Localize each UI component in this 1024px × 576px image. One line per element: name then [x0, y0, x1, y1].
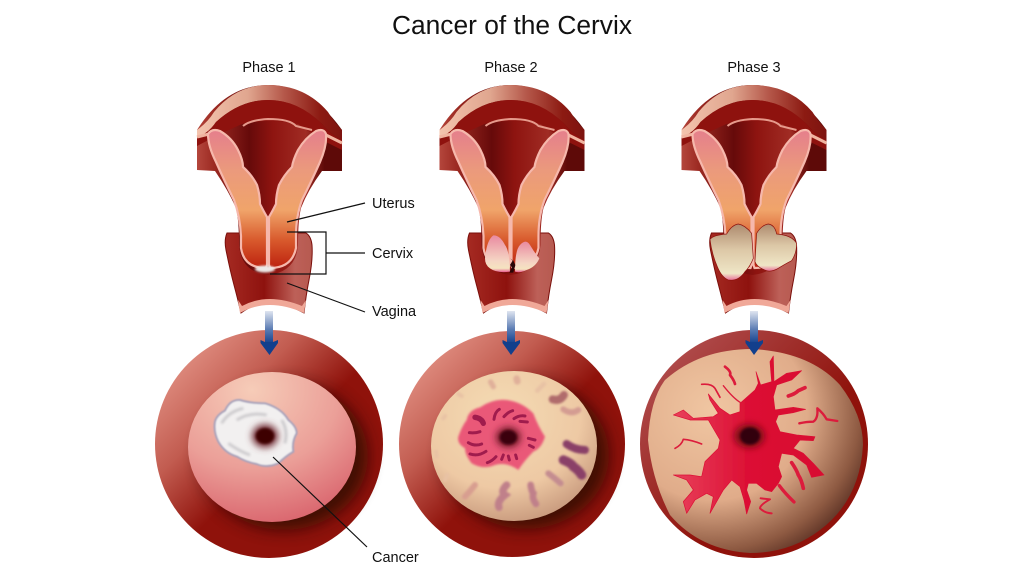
leader: cervix bracket	[270, 232, 365, 274]
diagram: uterus phase 3	[682, 85, 826, 313]
arrow	[260, 311, 278, 355]
central os	[734, 424, 765, 448]
tumours	[485, 235, 539, 273]
circle: cervix view phase 3	[640, 330, 868, 558]
diagram: uterus phase 1	[197, 85, 342, 313]
diagram: uterus phase 2	[440, 85, 584, 313]
circle: cervix view phase 2	[399, 331, 625, 557]
leader: cancer	[273, 457, 367, 547]
label: cancer: Cancer	[372, 550, 419, 566]
phase 3 column	[640, 60, 868, 558]
circle: cervix view phase 1	[155, 330, 383, 558]
phase 1 column	[155, 60, 383, 558]
tumours	[710, 224, 797, 280]
leader: vagina	[287, 283, 365, 312]
leader: uterus	[287, 203, 365, 222]
arrow	[746, 311, 763, 355]
red spreading lesion	[673, 356, 824, 514]
heading: Phase 3: Phase 3	[727, 60, 781, 76]
arrow	[502, 311, 520, 355]
label: cervix: Cervix	[372, 246, 414, 262]
title: Cancer of the Cervix	[392, 12, 632, 40]
heading: Phase 1: Phase 1	[242, 60, 296, 76]
label: uterus: Uterus	[372, 196, 415, 212]
heading: Phase 2: Phase 2	[484, 60, 538, 76]
phase 2 column	[399, 60, 625, 557]
dark streaks	[468, 409, 535, 463]
pink lesion	[458, 400, 545, 470]
small vessels	[675, 367, 837, 513]
spots	[436, 379, 585, 507]
central os	[496, 427, 521, 448]
label: vagina: Vagina	[372, 304, 417, 320]
white lesion	[215, 400, 297, 466]
labels and leader lines	[270, 196, 419, 566]
early lesion	[255, 266, 275, 272]
